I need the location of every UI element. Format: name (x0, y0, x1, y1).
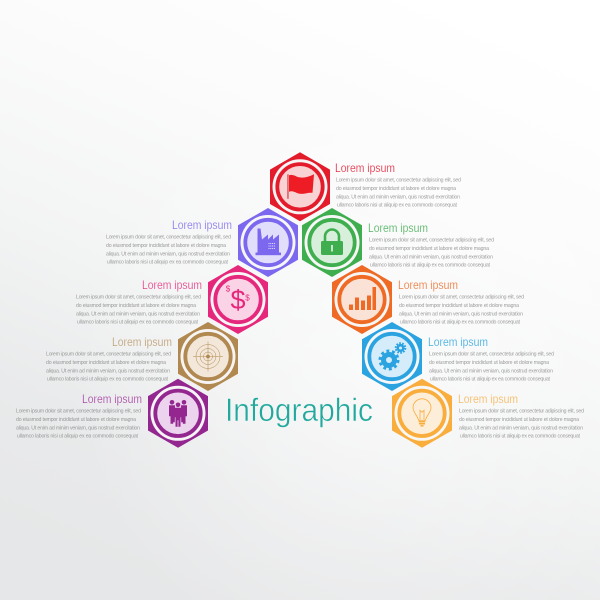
text block: red: Lorem ipsum (335, 162, 395, 175)
text block: violet (106, 219, 232, 266)
icon: light bulb (413, 399, 431, 426)
icon: dollar signs: $ (230, 285, 246, 315)
text block: orange: do eiusmod tempor incididunt ut labore et dolore magna (399, 303, 519, 309)
title: Infographic: Infographic (225, 392, 373, 428)
text block: violet: do eiusmod tempor incididunt ut labore et dolore magna (106, 243, 226, 249)
text block: blue: aliqua. Ut enim ad minim veniam, quis nostrud exercitation (429, 368, 553, 374)
text block: blue (428, 336, 554, 383)
text block: pink: ullamco laboris nisi ut aliquip ex ea commodo consequat (77, 320, 199, 326)
text block: orange: ullamco laboris nisi ut aliquip ex ea commodo consequat (400, 320, 521, 326)
hexagon: green lock (302, 208, 362, 277)
text block: yellow: Lorem ipsum (458, 393, 518, 406)
text block: green: aliqua. Ut enim ad minim veniam, quis nostrud exercitation (369, 254, 493, 260)
icon: dollar signs: $ (245, 294, 250, 302)
text block: tan (46, 336, 172, 383)
hexagon: orange chart (332, 265, 392, 334)
hexagon: tan target (178, 322, 238, 391)
text block: purple: Lorem ipsum dolor sit amet, consectetur adipiscing elit, sed (16, 408, 141, 414)
hexagon: pink dollar (208, 265, 268, 334)
text block: violet: Lorem ipsum (172, 219, 232, 232)
text block: yellow: do eiusmod tempor incididunt ut labore et dolore magna (459, 417, 579, 423)
text block: red: Lorem ipsum dolor sit amet, consectetur adipiscing elit, sed (336, 178, 461, 184)
text block: purple: ullamco laboris nisi ut aliquip ex ea commodo consequat (17, 434, 139, 440)
text block: blue: do eiusmod tempor incididunt ut labore et dolore magna (429, 360, 549, 366)
text block: red: ullamco laboris nisi ut aliquip ex ea commodo consequat (337, 203, 458, 209)
text block: orange (398, 279, 524, 326)
text block: pink: aliqua. Ut enim ad minim veniam, quis nostrud exercitation (76, 311, 200, 317)
text block: purple: Lorem ipsum (82, 393, 142, 406)
text block: pink: Lorem ipsum dolor sit amet, consectetur adipiscing elit, sed (76, 294, 201, 300)
icon: dollar signs (226, 284, 250, 315)
text block: blue: Lorem ipsum dolor sit amet, consectetur adipiscing elit, sed (429, 352, 554, 358)
icon: people (169, 400, 187, 427)
text block: blue: Lorem ipsum (428, 336, 488, 349)
text block: green: Lorem ipsum dolor sit amet, consectetur adipiscing elit, sed (369, 238, 494, 244)
icon: target (193, 342, 223, 372)
hexagon: red flag (270, 152, 330, 221)
text block: violet: Lorem ipsum dolor sit amet, consectetur adipiscing elit, sed (106, 234, 231, 240)
text block: purple: aliqua. Ut enim ad minim veniam, quis nostrud exercitation (16, 425, 140, 431)
text block: green (368, 222, 494, 269)
hexagon: yellow bulb (392, 379, 452, 448)
text block: pink: Lorem ipsum (142, 279, 202, 292)
text block: green: do eiusmod tempor incididunt ut labore et dolore magna (369, 246, 489, 252)
text block: red (335, 162, 461, 209)
text block: tan: Lorem ipsum (112, 336, 172, 349)
text block: tan: Lorem ipsum dolor sit amet, consectetur adipiscing elit, sed (46, 352, 171, 358)
text block: tan: do eiusmod tempor incididunt ut labore et dolore magna (46, 360, 166, 366)
text block: yellow: ullamco laboris nisi ut aliquip ex ea commodo consequat (460, 434, 581, 440)
text block: pink: do eiusmod tempor incididunt ut labore et dolore magna (76, 303, 196, 309)
text block: red: aliqua. Ut enim ad minim veniam, quis nostrud exercitation (336, 194, 460, 200)
text block: violet: aliqua. Ut enim ad minim veniam, quis nostrud exercitation (106, 251, 230, 257)
hexagon: violet factory (238, 208, 298, 277)
text block: orange: Lorem ipsum dolor sit amet, consectetur adipiscing elit, sed (399, 294, 524, 300)
text block: tan: ullamco laboris nisi ut aliquip ex ea commodo consequat (47, 377, 169, 383)
icon: dollar signs: $ (226, 284, 231, 294)
icon: bar chart (349, 287, 376, 310)
text block: red: do eiusmod tempor incididunt ut labore et dolore magna (336, 186, 456, 192)
text block: purple (16, 393, 142, 440)
text block: yellow: aliqua. Ut enim ad minim veniam, quis nostrud exercitation (459, 425, 583, 431)
text block: violet: ullamco laboris nisi ut aliquip ex ea commodo consequat (107, 260, 229, 266)
text block: yellow (458, 393, 584, 440)
text block: orange: Lorem ipsum (398, 279, 458, 292)
icon: factory (256, 228, 281, 255)
text block: green: Lorem ipsum (368, 222, 428, 235)
icon: flag (287, 174, 314, 199)
icon: padlock (321, 230, 343, 255)
text block: green: ullamco laboris nisi ut aliquip ex ea commodo consequat (370, 263, 491, 269)
hexagon: purple people (148, 379, 208, 448)
text block: yellow: Lorem ipsum dolor sit amet, consectetur adipiscing elit, sed (459, 408, 584, 414)
text block: purple: do eiusmod tempor incididunt ut labore et dolore magna (16, 417, 136, 423)
text block: blue: ullamco laboris nisi ut aliquip ex ea commodo consequat (430, 377, 551, 383)
text block: pink (76, 279, 202, 326)
hexagon: blue gears (362, 322, 422, 391)
icon: gears (380, 343, 405, 369)
text block: orange: aliqua. Ut enim ad minim veniam, quis nostrud exercitation (399, 311, 523, 317)
text block: tan: aliqua. Ut enim ad minim veniam, quis nostrud exercitation (46, 368, 170, 374)
